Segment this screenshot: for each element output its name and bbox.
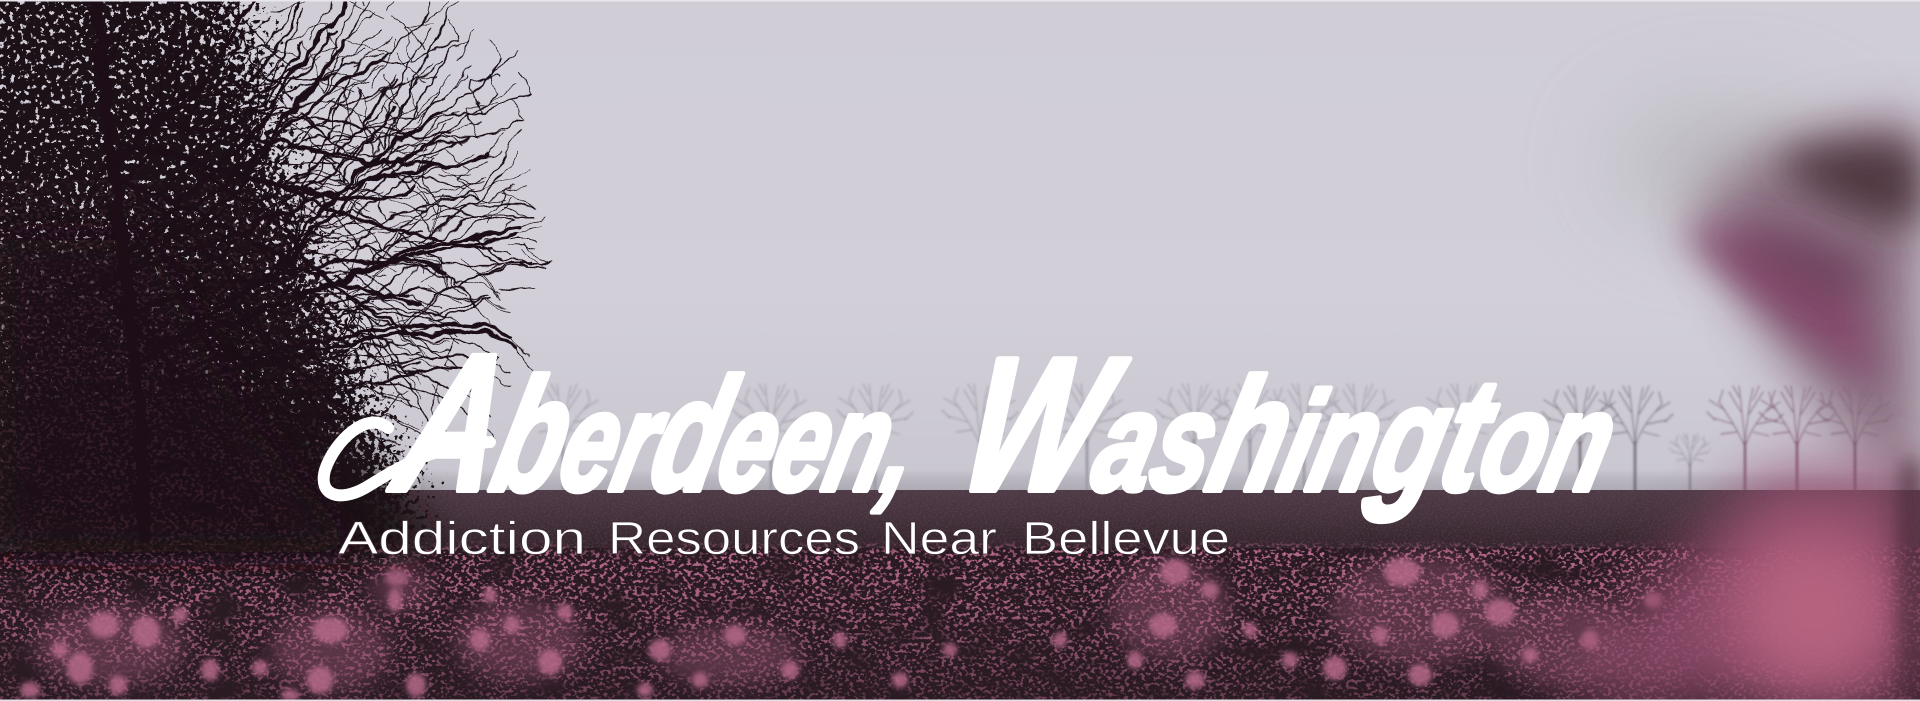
solid core of the trunk and shrubs	[0, 240, 360, 552]
sky background	[0, 0, 1920, 495]
subtitle: Bellevue	[1022, 512, 1230, 564]
title text: Aberdeen,	[380, 314, 1024, 531]
foreground row of bare trees	[1542, 386, 1893, 492]
top edge line	[0, 0, 1920, 2]
title swash on the capital A	[324, 423, 490, 495]
subtitle: Near	[881, 512, 997, 564]
dark field	[0, 490, 1920, 580]
subtitle: Addiction	[338, 512, 586, 564]
bottom edge line	[0, 700, 1920, 701]
mauve leaf flecks	[0, 180, 340, 545]
shaded field edge under the tree	[0, 400, 440, 552]
title text: Washington	[945, 318, 1676, 530]
title	[324, 314, 1644, 531]
blurred foreground foliage upper right	[1610, 105, 1920, 500]
subtitle: Resources	[608, 512, 860, 564]
soft flower clusters	[35, 555, 1630, 690]
tree branches	[78, 0, 550, 540]
flower meadow	[0, 540, 1920, 701]
blurred flower blobs	[20, 558, 1662, 701]
blurred foreground petals lower right	[1560, 460, 1920, 701]
field texture	[0, 490, 1920, 560]
tree canopy mass	[0, 0, 445, 552]
left tree	[0, 0, 550, 552]
distant tree line	[420, 384, 1920, 492]
